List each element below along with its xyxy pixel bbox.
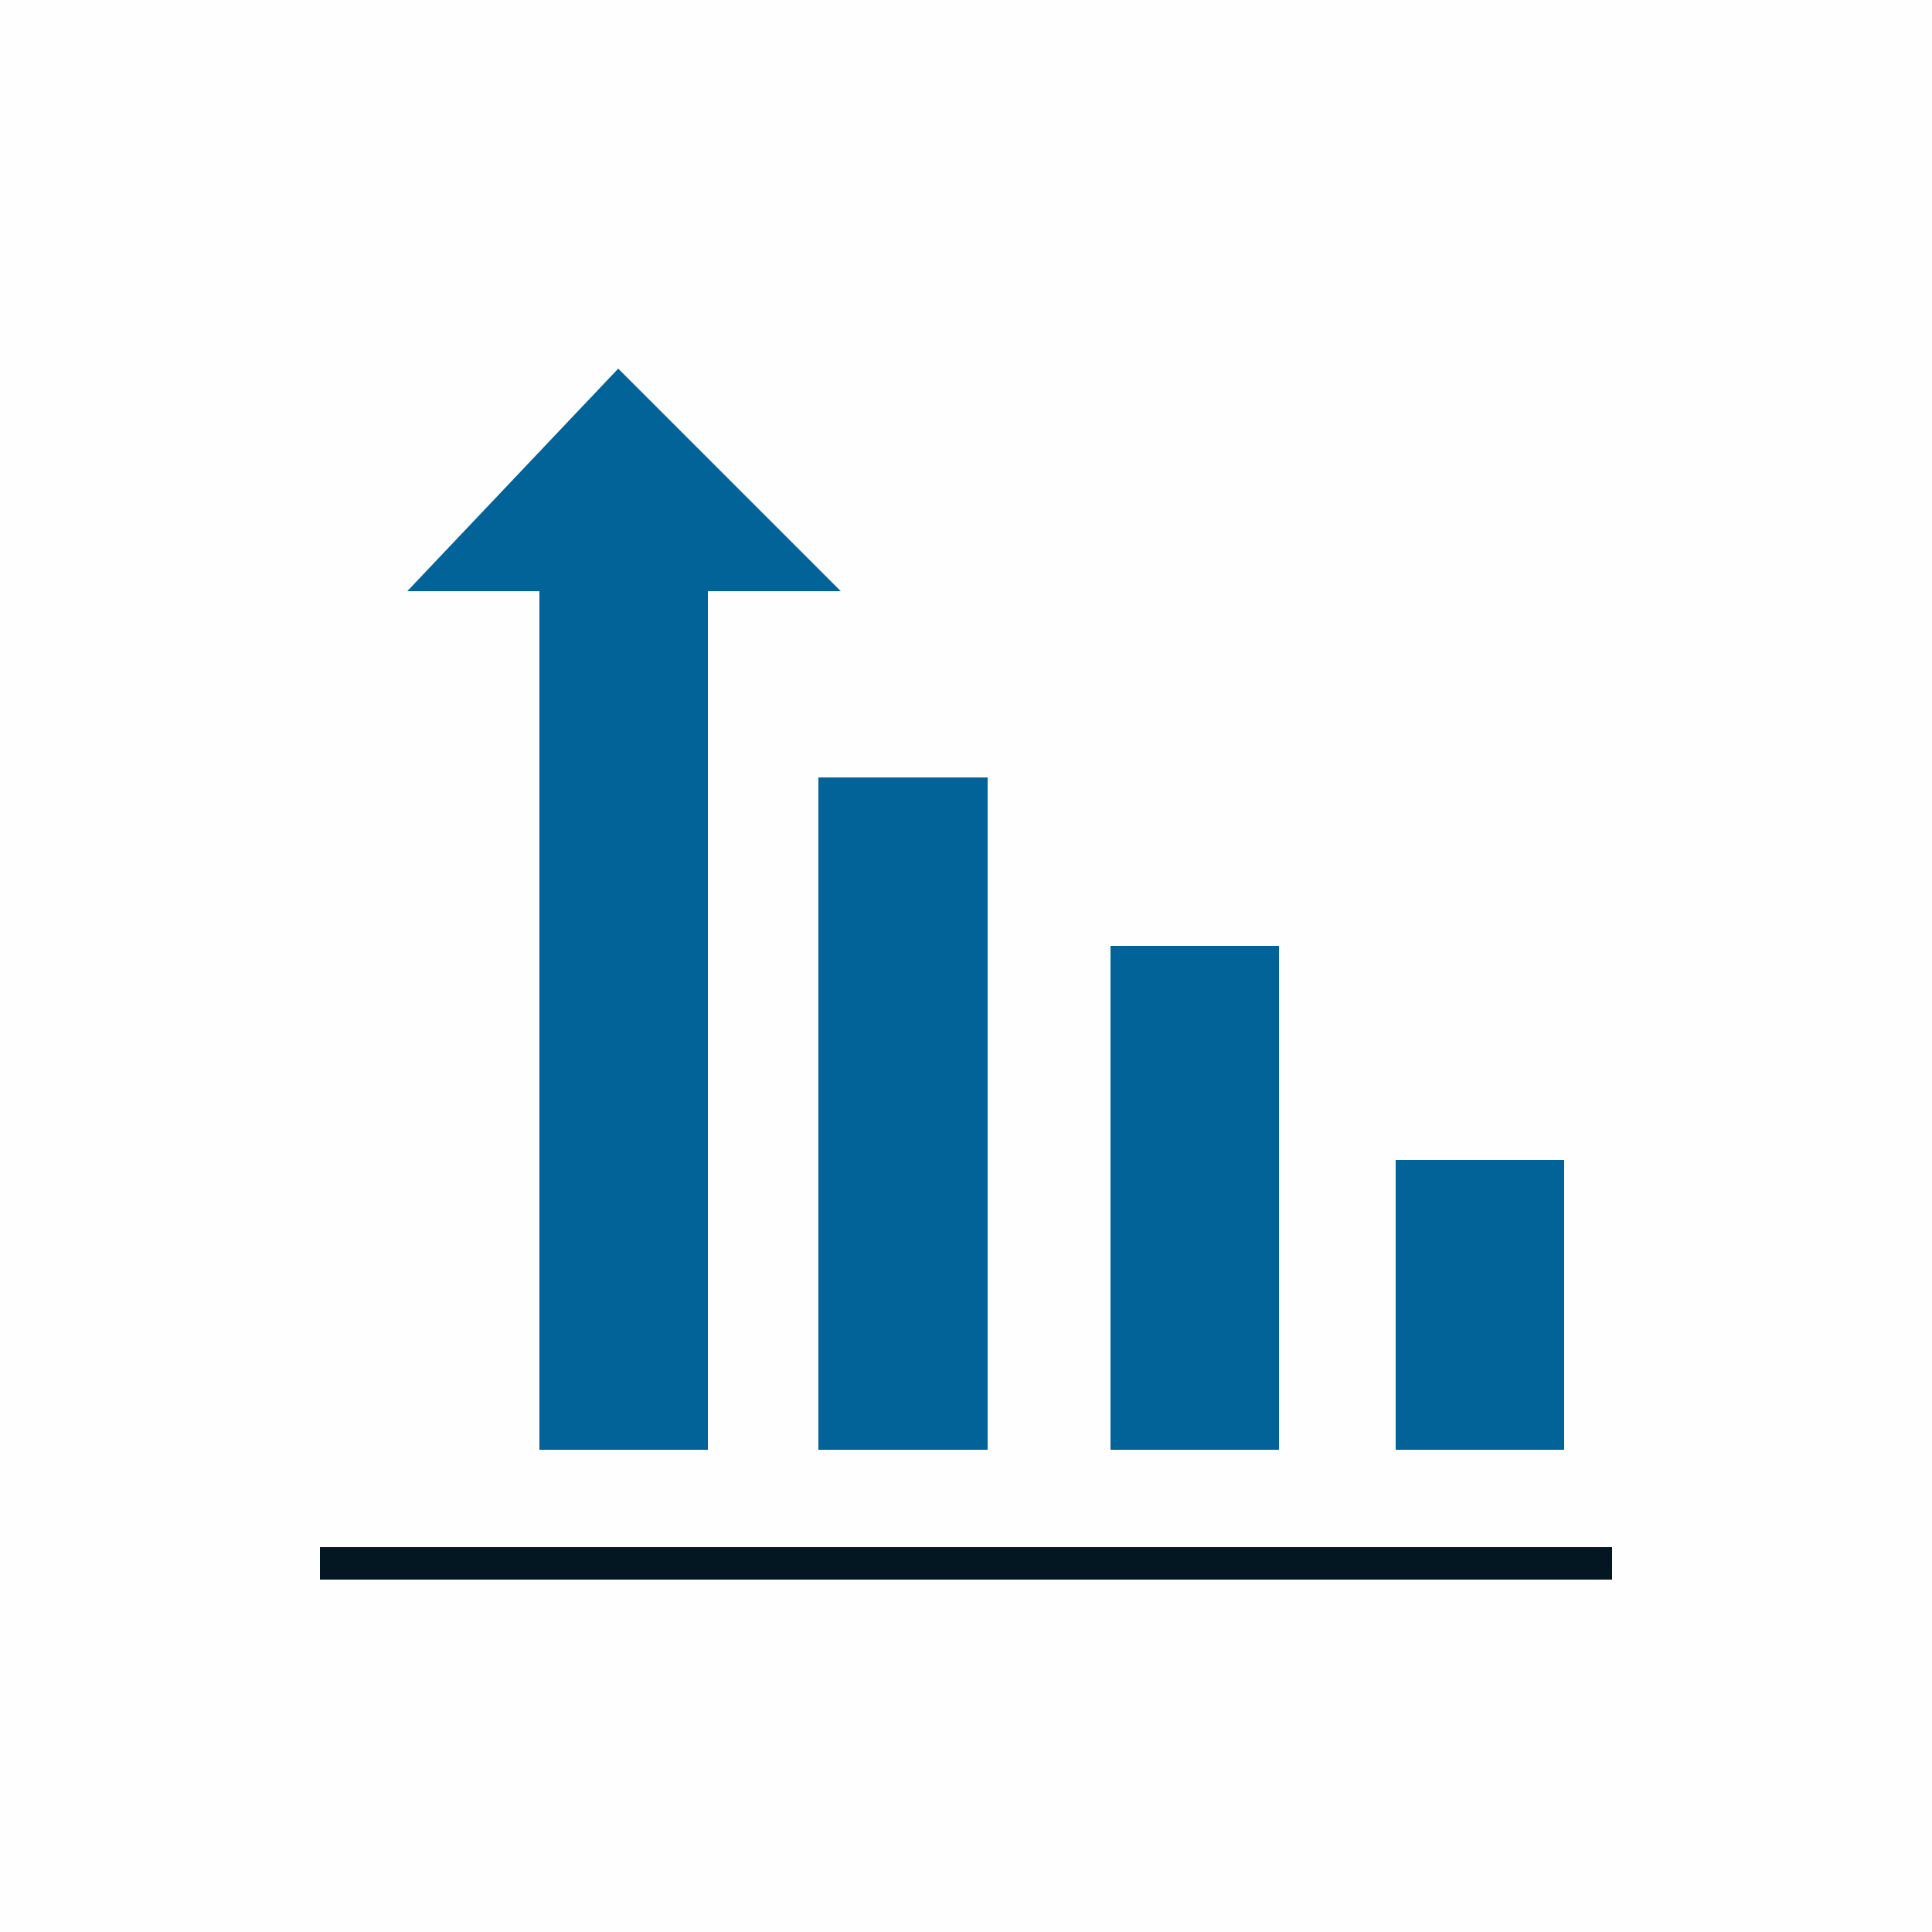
baseline axis [320,1547,1612,1580]
bar 4 [1396,1160,1564,1450]
arrow: tallest bar with arrowhead [407,369,841,1450]
bar 2 [818,777,988,1450]
bar 3 [1111,946,1279,1450]
